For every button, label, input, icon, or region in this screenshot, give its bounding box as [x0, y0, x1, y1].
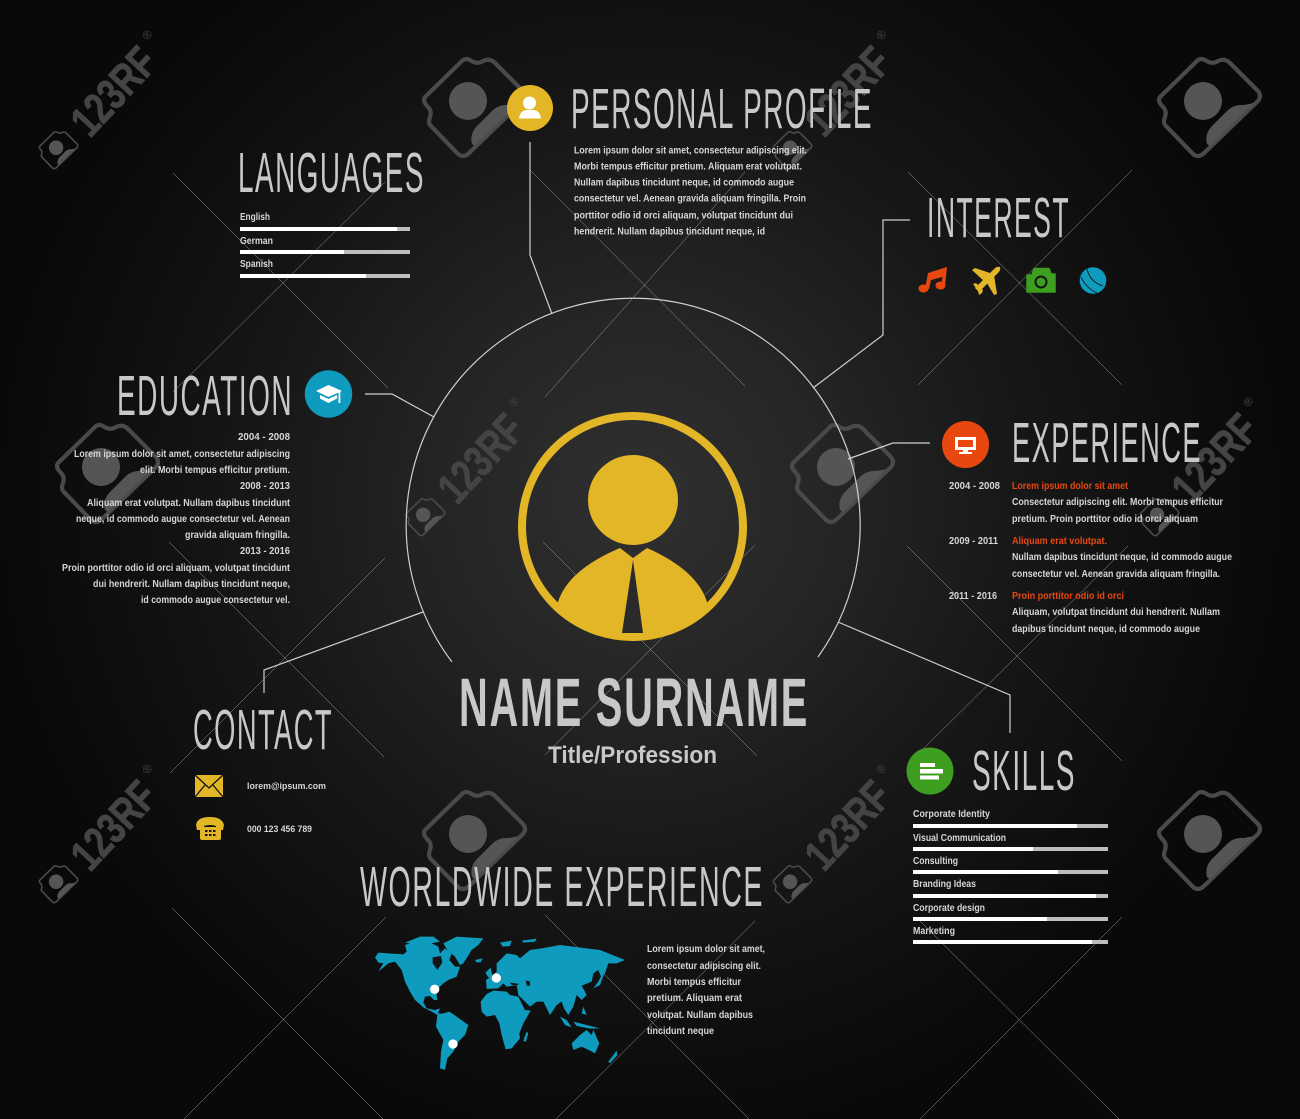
icon: camera	[1027, 268, 1055, 292]
watermark: row 1: ®	[139, 27, 155, 43]
text: education body: Aliquam erat volutpat. Nullam dapibus tincidunt	[87, 498, 290, 509]
central ring arc	[406, 298, 860, 662]
panel: education	[62, 364, 352, 606]
icon: monitor	[942, 421, 989, 468]
text: experience body: Proin porttitor odio id orci	[1012, 591, 1124, 602]
text: experience body: Nullam dapibus tincidunt neque, id commodo augue	[1012, 552, 1232, 563]
name: NAME SURNAME	[459, 664, 809, 741]
text: experience body	[949, 481, 1232, 635]
watermark: row 2: 123RF	[428, 405, 534, 513]
panel: contact	[193, 698, 333, 840]
text: profile body: Lorem ipsum dolor sit amet, consectetur adipiscing elit.	[574, 146, 807, 156]
text: experience body: 2004 - 2008	[949, 481, 1000, 492]
panel: interest	[918, 186, 1106, 295]
text: education body	[62, 432, 290, 606]
text: worldwide body	[647, 944, 765, 1037]
watermark: row 3: ®	[873, 761, 889, 777]
watermark: row 3	[39, 761, 1260, 903]
text: worldwide body: pretium. Aliquam erat	[647, 993, 743, 1004]
text: education body: 2008 - 2013	[240, 481, 290, 492]
text: profile body: Morbi tempus efficitur pretium. Aliquam erat volutpat.	[574, 162, 802, 172]
watermark: row 1: 123RF	[795, 38, 901, 146]
language bars: English	[240, 212, 270, 223]
watermark: row 3: 123RF	[61, 772, 167, 880]
watermark: row 3: ®	[139, 761, 155, 777]
watermark: row 2: ®	[1240, 394, 1256, 410]
language bars: Spanish	[240, 259, 273, 270]
text: education body: gravida aliquam fringilla.	[185, 530, 290, 541]
skill bars: Corporate design	[913, 903, 985, 914]
text: education body: 2013 - 2016	[240, 546, 290, 557]
world map	[375, 937, 625, 1070]
icon: ball	[1080, 267, 1106, 294]
watermark: row 2: 123RF	[1162, 405, 1268, 513]
text: education body: id commodo augue consectetur vel.	[141, 595, 290, 606]
watermarks	[39, 27, 1268, 903]
text: worldwide body: tincidunt neque	[647, 1026, 714, 1037]
text: experience body: 2011 - 2016	[949, 591, 997, 602]
profession: Title/Profession	[548, 742, 717, 769]
text: profile body: hendrerit. Nullam dapibus tincidunt neque, id	[574, 226, 765, 238]
icon: graduation cap	[305, 370, 352, 418]
panel: interest: INTEREST	[927, 186, 1070, 249]
text: CONTACT	[193, 698, 333, 761]
watermark: row 3: 123RF	[795, 772, 901, 880]
watermark: row 2: ®	[506, 394, 522, 410]
panel: education: EDUCATION	[117, 364, 293, 427]
text: experience body: dapibus tincidunt neque, id commodo augue	[1012, 624, 1200, 635]
text: worldwide body: Morbi tempus efficitur	[647, 977, 741, 988]
map markers	[430, 973, 501, 1049]
icon: profile	[507, 85, 553, 131]
text: PERSONAL PROFILE	[571, 77, 873, 140]
text: profile body	[574, 146, 807, 238]
text: education body: neque, id commodo augue consectetur vel. Aenean	[76, 514, 290, 525]
skill bars	[913, 809, 1108, 944]
heading: worldwide experience: WORLDWIDE EXPERIENCE	[360, 855, 764, 918]
skill bars: Marketing	[913, 926, 955, 937]
avatar icon	[522, 416, 743, 660]
watermark: row 1	[39, 27, 1260, 169]
language bars: German	[240, 236, 273, 247]
watermark: row 1: ®	[873, 27, 889, 43]
watermark: row 1: 123RF	[61, 38, 167, 146]
text: education body: 2004 - 2008	[238, 432, 290, 443]
panel: experience	[942, 411, 1232, 635]
text: worldwide body: volutpat. Nullam dapibus	[647, 1010, 753, 1021]
text: email: lorem@ipsum.com	[247, 781, 326, 792]
text: experience body: Aliquam, volutpat tincidunt dui hendrerit. Nullam	[1012, 607, 1220, 618]
text: education body: Lorem ipsum dolor sit amet, consectetur adipiscing	[74, 449, 290, 460]
text: experience body: Lorem ipsum dolor sit amet	[1012, 481, 1128, 492]
icon: telephone	[196, 817, 224, 840]
skill bars: Visual Communication	[913, 833, 1006, 844]
text: education body: elit. Morbi tempus efficitur pretium.	[140, 465, 290, 476]
text: experience body: Aliquam erat volutpat.	[1012, 536, 1107, 547]
text: experience body: 2009 - 2011	[949, 536, 998, 547]
language bars	[240, 212, 410, 278]
panel: languages	[238, 141, 425, 278]
text: LANGUAGES	[238, 141, 425, 204]
panel: skills	[906, 739, 1108, 944]
panel: worldwide experience	[360, 855, 765, 1070]
text: profile body: consectetur vel. Aenean gravida aliquam fringilla. Proin	[574, 194, 806, 204]
text: phone: 000 123 456 789	[247, 824, 312, 835]
text: education body: dui hendrerit. Nullam dapibus tincidunt neque,	[93, 579, 290, 590]
text: experience body: pretium. Proin porttitor odio id orci aliquam	[1012, 514, 1198, 525]
skill bars: Consulting	[913, 856, 958, 867]
text: education body: Proin porttitor odio id orci aliquam, volutpat tincidunt	[62, 563, 290, 574]
text: experience body: consectetur vel. Aenean gravida aliquam fringilla.	[1012, 569, 1220, 580]
text: profile body: Nullam dapibus tincidunt neque, id commodo augue	[574, 178, 794, 188]
text: worldwide body: Lorem ipsum dolor sit amet,	[647, 944, 765, 955]
watermark: row 2	[57, 394, 1268, 536]
text: profile body: porttitor odio id orci aliquam, volutpat tincidunt dui	[574, 210, 793, 222]
skill bars: Branding Ideas	[913, 879, 976, 890]
icon: skills	[906, 748, 954, 794]
panel: skills: SKILLS	[972, 739, 1076, 802]
connector lines	[264, 142, 1010, 733]
text: worldwide body: consectetur adipiscing elit.	[647, 961, 761, 972]
icon: plane	[972, 267, 1000, 295]
skill bars: Corporate Identity	[913, 809, 990, 820]
icon: music	[918, 267, 947, 292]
panel: personal profile	[507, 77, 873, 238]
icon: envelope	[195, 775, 223, 797]
text: experience body: Consectetur adipiscing elit. Morbi tempus efficitur	[1012, 497, 1223, 508]
